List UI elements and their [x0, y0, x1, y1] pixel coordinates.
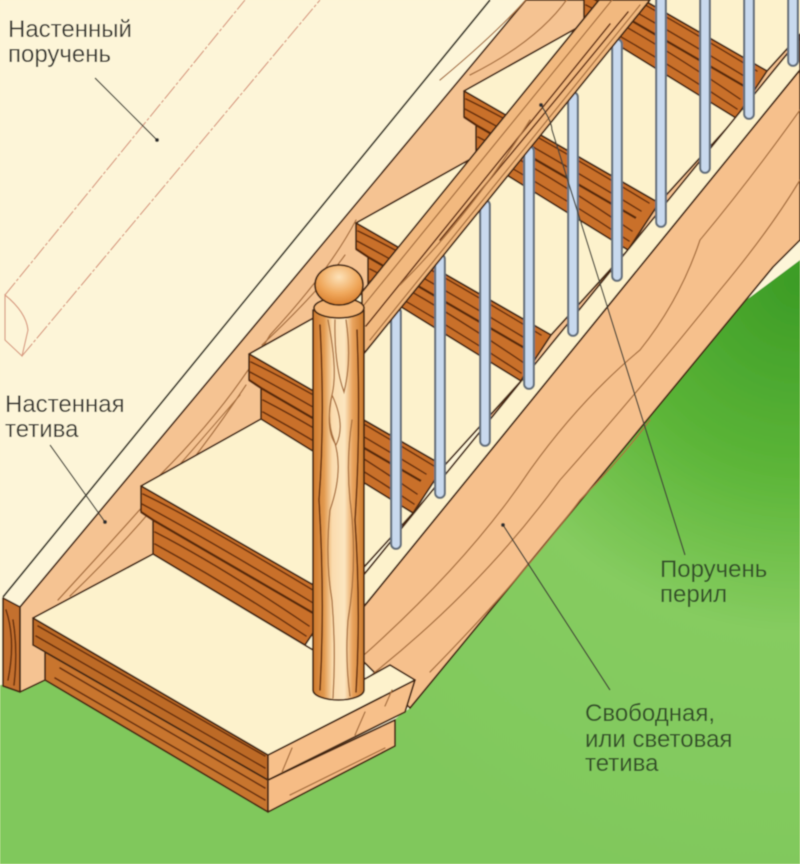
bottom step [33, 554, 415, 812]
label: free string: тетива [585, 750, 659, 777]
wall edge line [3, 0, 490, 597]
riser 2 [141, 486, 336, 645]
label: wall string: тетива [5, 416, 79, 443]
free string [362, 70, 800, 708]
tread 2 [141, 419, 413, 598]
label: banister handrail: Поручень [660, 556, 767, 583]
wall handrail outline [5, 0, 320, 356]
label: wall handrail: поручень [8, 41, 111, 68]
wall string [3, 0, 800, 692]
label: free string: или световая [585, 726, 732, 753]
spindles [396, 0, 793, 544]
label: free string: Свободная, [585, 700, 715, 727]
label: banister handrail: перил [660, 581, 727, 608]
leader: free string [501, 523, 610, 690]
leader: wall string [50, 445, 107, 524]
label: wall handrail: Настенный [8, 16, 132, 43]
string cap strip [362, 38, 800, 609]
leader: wall handrail [95, 78, 159, 142]
handrail [362, 0, 650, 356]
riser 4 [356, 223, 551, 382]
riser 3 [249, 354, 444, 513]
newel post [313, 265, 364, 700]
tread 4 [356, 156, 628, 335]
leader: banister handrail [539, 103, 685, 555]
green floor [0, 260, 800, 864]
tread 5 [464, 24, 736, 203]
riser 6 [572, 0, 767, 118]
tread 6 [572, 0, 800, 71]
label: wall string: Настенная [5, 391, 125, 418]
riser 5 [464, 91, 659, 250]
tread 3 [249, 287, 521, 466]
